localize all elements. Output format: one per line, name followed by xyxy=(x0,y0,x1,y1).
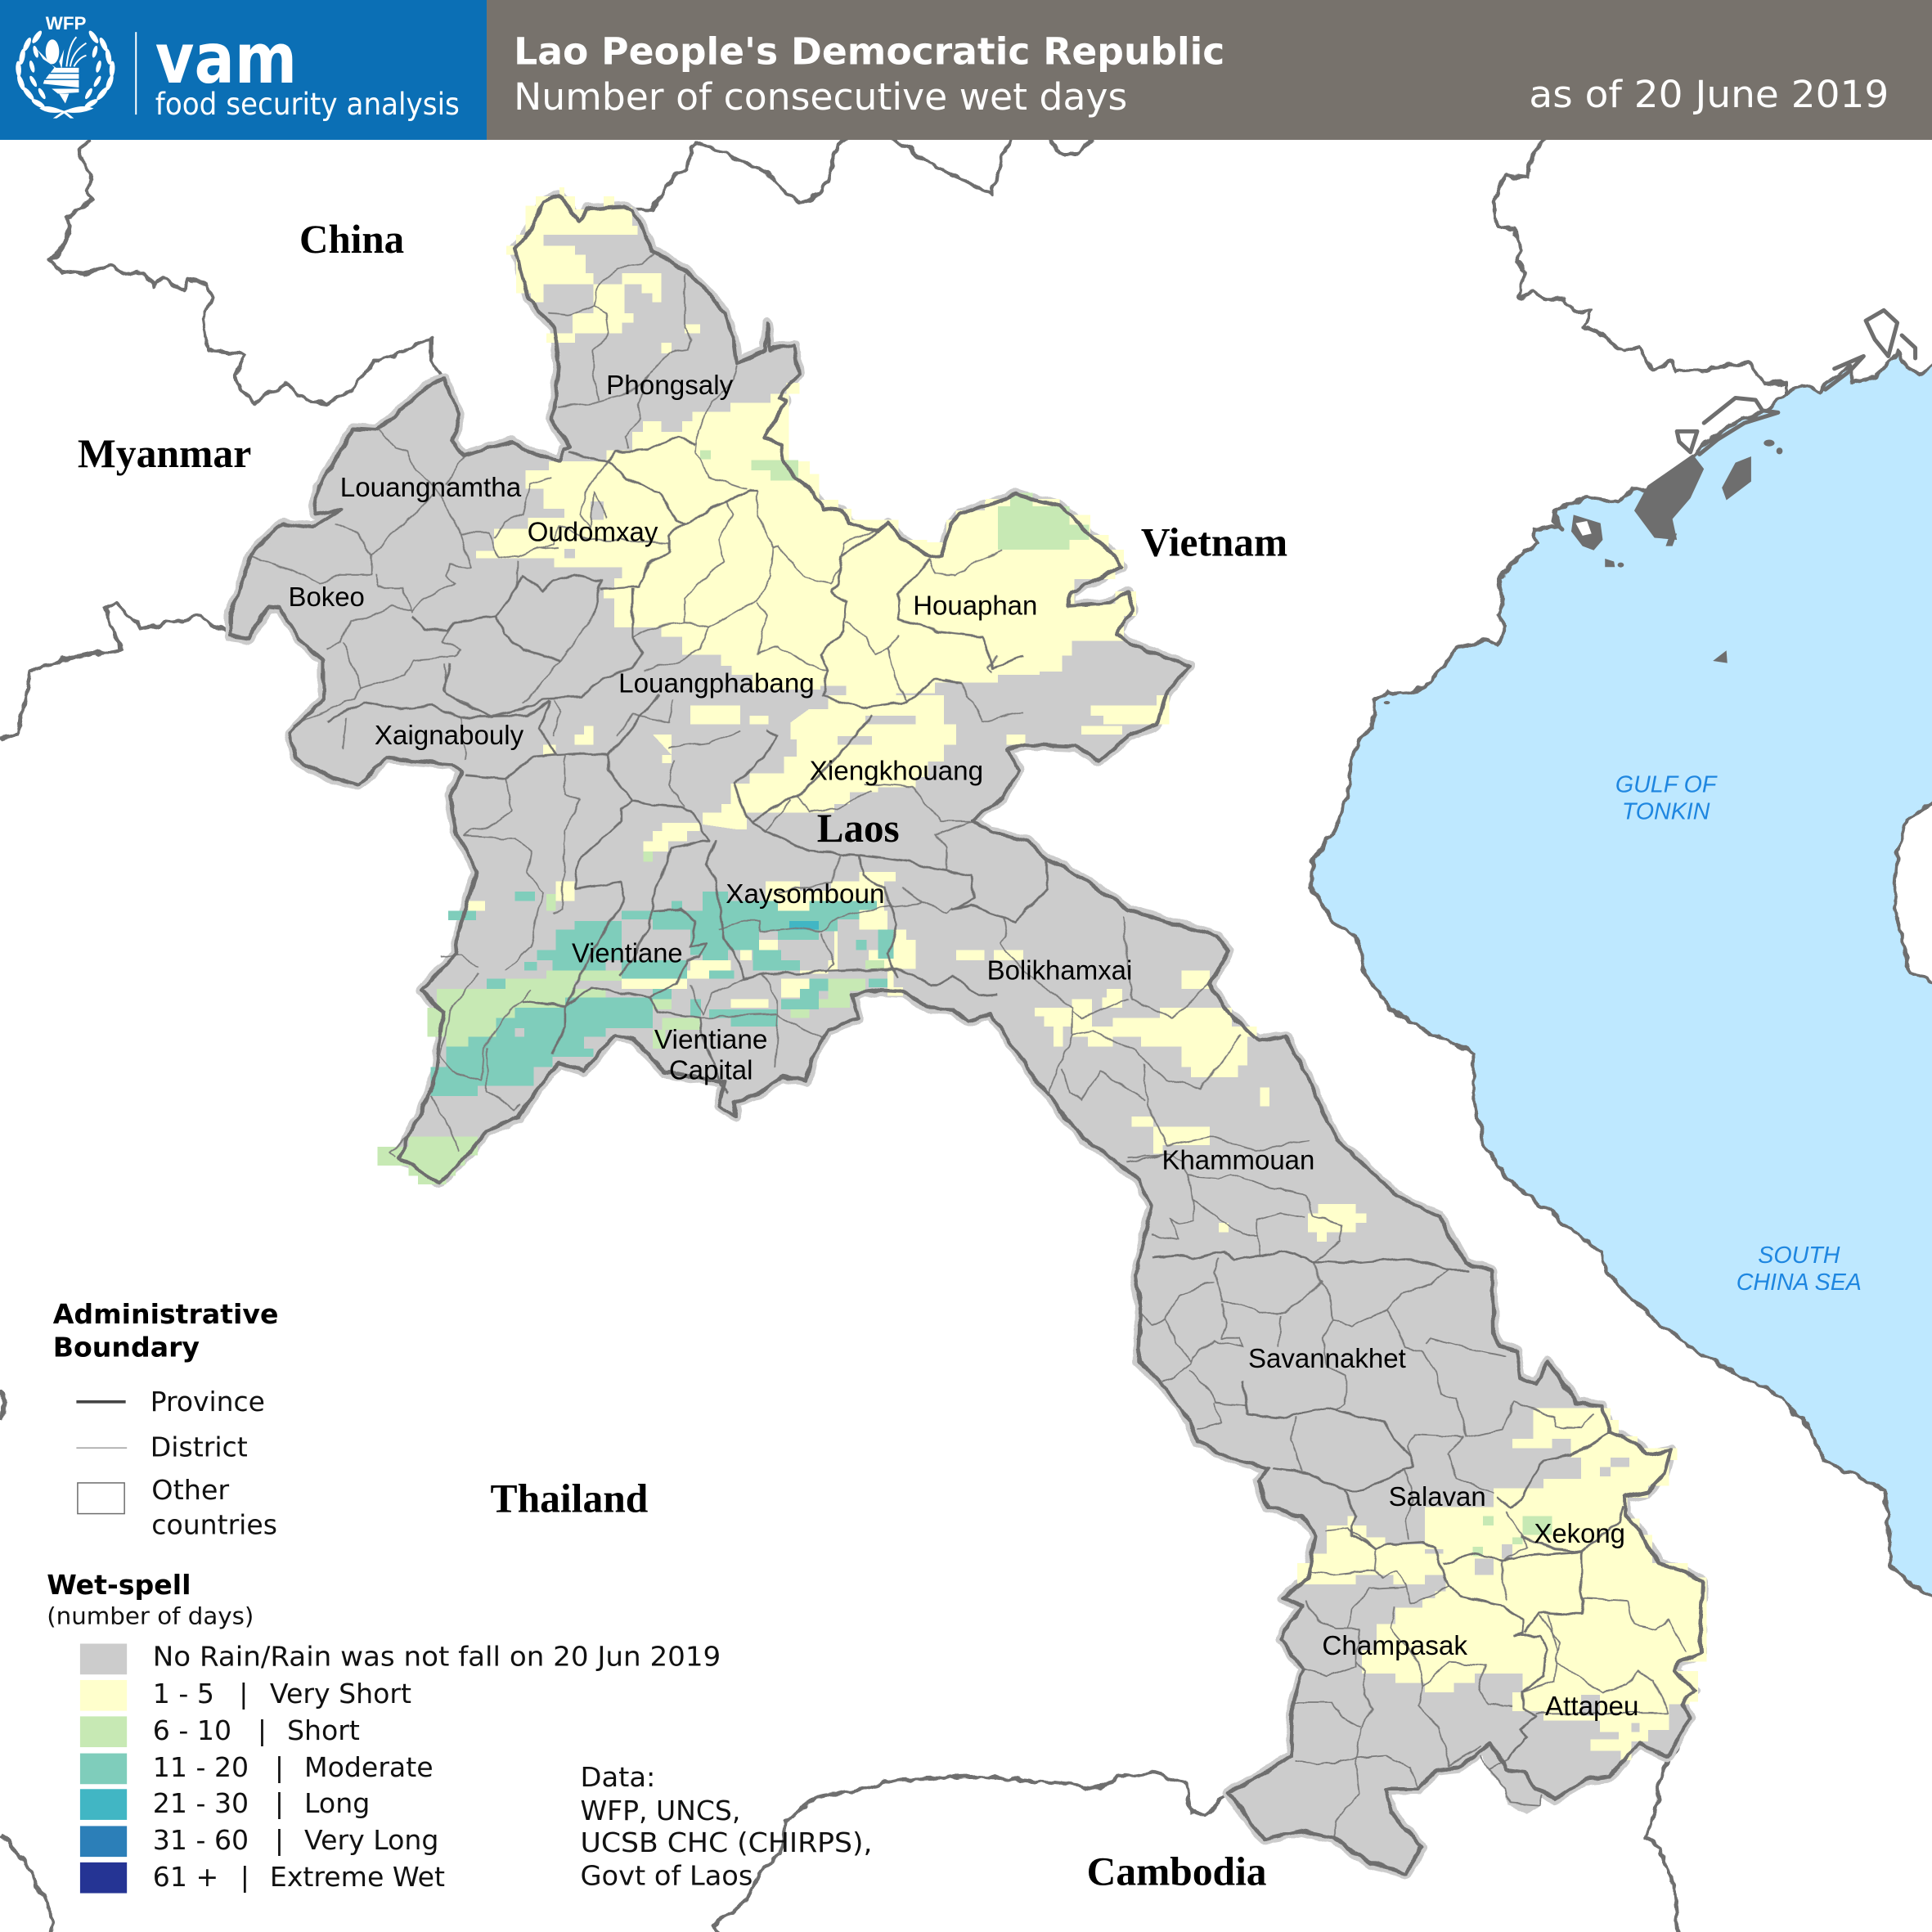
legend: wet-spell: No Rain/Rain was not fall on 20 Jun 2019 xyxy=(153,1641,721,1673)
legend: wet-spell: Very Long xyxy=(304,1824,438,1856)
province labels: Vientiane xyxy=(572,938,683,968)
sea labels: CHINA SEA xyxy=(1737,1269,1862,1296)
country labels xyxy=(78,217,1287,1894)
province labels: Phongsaly xyxy=(606,371,734,401)
legend: wet-spell: | xyxy=(240,1861,249,1893)
swatch: moderate xyxy=(80,1754,127,1784)
province labels: Savannakhet xyxy=(1248,1344,1406,1374)
sea labels xyxy=(1615,772,1862,1296)
wet-spell layer: very short, Houaphan east xyxy=(862,499,1136,683)
province labels: Xaignabouly xyxy=(375,721,524,751)
header date: as of 20 June 2019 xyxy=(1529,73,1889,116)
province labels: Vientiane xyxy=(654,1025,767,1055)
wet-spell layer: very short (yellow), north xyxy=(476,187,1040,700)
legend: wet-spell: Wet-spell xyxy=(47,1569,191,1601)
legend: wet-spell: 6 - 10 xyxy=(153,1714,231,1746)
swatch: very short xyxy=(80,1680,127,1711)
legend: wet-spell: 31 - 60 xyxy=(153,1824,249,1856)
province labels: Louangphabang xyxy=(618,669,815,699)
country labels: Vietnam xyxy=(1141,519,1287,564)
swatch: extreme wet xyxy=(80,1862,127,1894)
province labels: Xekong xyxy=(1534,1519,1625,1549)
legend: administrative boundary: Other xyxy=(151,1474,230,1506)
legend: wet-spell: Very Short xyxy=(270,1678,411,1710)
legend: administrative boundary xyxy=(53,1298,278,1540)
district and province lines: north xyxy=(251,253,1686,1838)
province labels: Attapeu xyxy=(1545,1692,1638,1722)
country labels: Myanmar xyxy=(78,431,251,476)
district line xyxy=(76,1448,127,1449)
data sources: Govt of Laos xyxy=(581,1860,753,1892)
province labels: Bokeo xyxy=(288,582,365,613)
swatch: no rain xyxy=(80,1644,127,1674)
wet-spell layer: short (green), Houaphan xyxy=(998,493,1090,550)
province labels: Salavan xyxy=(1389,1482,1486,1512)
legend: wet-spell: 1 - 5 xyxy=(153,1678,214,1710)
district and province lines: south xyxy=(1126,1155,1686,1838)
legend: wet-spell xyxy=(47,1569,721,1894)
province labels: Xiengkhouang xyxy=(810,757,983,787)
country labels: Laos xyxy=(817,806,900,851)
swatch: very long xyxy=(80,1826,127,1857)
wet-spell layer: central Laos xyxy=(377,695,1269,1184)
sea labels: SOUTH xyxy=(1758,1242,1840,1269)
province labels: Oudomxay xyxy=(528,517,658,547)
data sources: UCSB CHC (CHIRPS), xyxy=(581,1826,873,1858)
legend: wet-spell: (number of days) xyxy=(47,1602,254,1629)
Laos national border xyxy=(231,196,1703,1873)
province line xyxy=(76,1400,126,1404)
province labels: Champasak xyxy=(1322,1631,1468,1661)
legend: wet-spell: | xyxy=(275,1751,284,1783)
country labels: China xyxy=(299,217,404,262)
legend: wet-spell: 11 - 20 xyxy=(153,1751,249,1783)
legend: wet-spell: | xyxy=(275,1824,284,1856)
logo divider xyxy=(135,32,137,115)
legend: administrative boundary: District xyxy=(151,1431,248,1463)
country labels: Thailand xyxy=(491,1476,649,1521)
WFP text: WFP xyxy=(46,13,86,34)
vam wordmark: vam xyxy=(155,19,297,99)
legend: wet-spell: Short xyxy=(287,1714,360,1746)
map of Laos: base grey no-rain area xyxy=(231,196,1703,1873)
legend: wet-spell: Extreme Wet xyxy=(270,1861,445,1893)
province labels: Houaphan xyxy=(913,591,1037,622)
WFP vam logo panel xyxy=(0,0,487,140)
district and province lines: central xyxy=(343,717,1309,1157)
header title: Lao People's Democratic Republic xyxy=(514,29,1224,73)
data sources: WFP, UNCS, xyxy=(581,1795,740,1826)
legend: administrative boundary: Boundary xyxy=(53,1332,200,1364)
header subtitle: Number of consecutive wet days xyxy=(514,75,1127,119)
province labels: Xaysomboun xyxy=(726,879,885,910)
data sources: Data: xyxy=(581,1761,655,1793)
legend: wet-spell: | xyxy=(258,1714,267,1746)
province labels xyxy=(288,371,1638,1722)
data sources xyxy=(581,1761,873,1892)
tagline: food security analysis xyxy=(155,86,460,122)
legend: wet-spell: Long xyxy=(304,1787,370,1819)
province labels: Louangnamtha xyxy=(340,473,522,503)
legend: administrative boundary: Administrative xyxy=(53,1298,278,1330)
province labels: Capital xyxy=(669,1056,753,1086)
legend: wet-spell: 21 - 30 xyxy=(153,1787,249,1819)
country labels: Cambodia xyxy=(1087,1849,1267,1894)
province labels: Bolikhamxai xyxy=(987,956,1132,986)
wet-spell layer: southern Laos xyxy=(1219,1204,1706,1760)
legend: wet-spell: Moderate xyxy=(304,1751,434,1783)
other countries box xyxy=(78,1483,124,1514)
icon: laurel wreath with corn and wheat xyxy=(16,29,115,119)
legend: wet-spell: | xyxy=(239,1678,248,1710)
province labels: Khammouan xyxy=(1162,1146,1314,1176)
swatch: short xyxy=(80,1716,127,1747)
sea labels: GULF OF xyxy=(1615,772,1718,798)
header band xyxy=(487,0,1932,140)
legend: administrative boundary: countries xyxy=(151,1508,277,1540)
sea labels: TONKIN xyxy=(1622,799,1710,825)
islands and coastal delta xyxy=(1384,310,1916,704)
sea: Gulf of Tonkin and South China Sea xyxy=(1311,353,1932,1596)
swatch: long xyxy=(80,1789,127,1820)
legend: administrative boundary: Province xyxy=(151,1386,265,1418)
legend: wet-spell: | xyxy=(275,1787,284,1819)
legend: wet-spell: 61 + xyxy=(153,1861,218,1893)
